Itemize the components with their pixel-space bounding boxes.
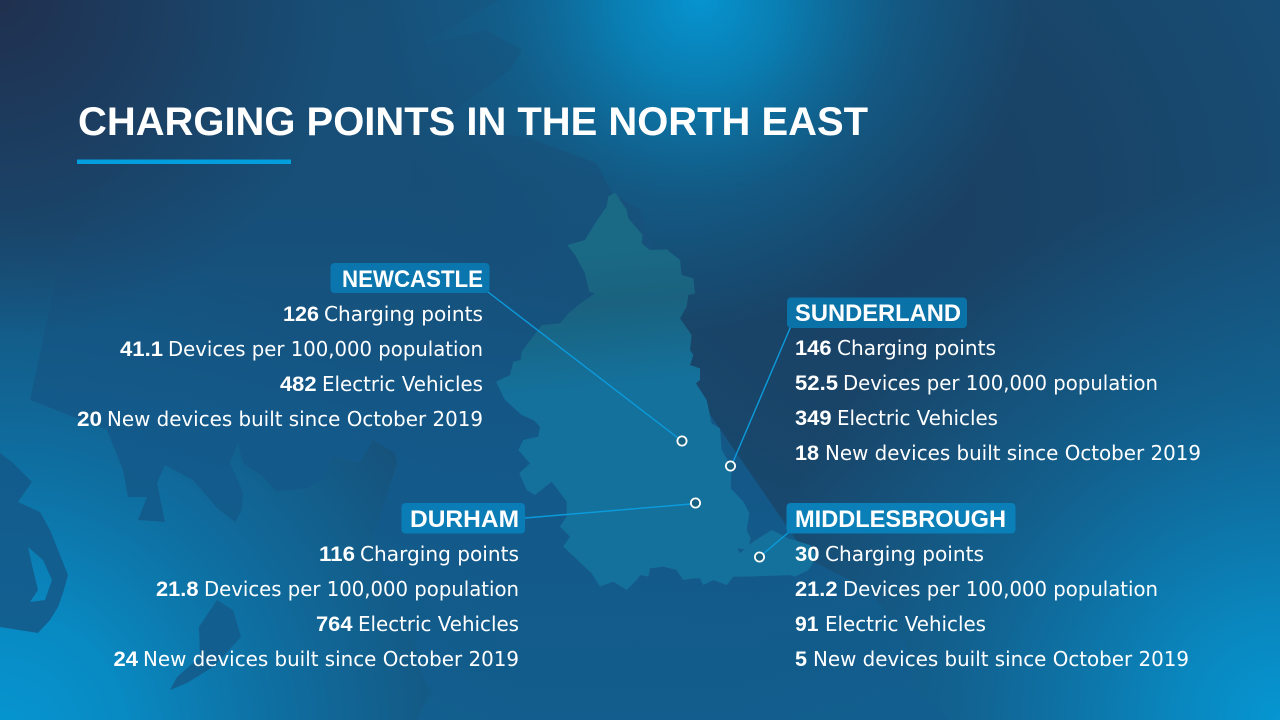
stats: Middlesbrough: Devices per 100,000 population: [843, 577, 1158, 601]
stats: Newcastle: Devices per 100,000 population: [168, 337, 483, 361]
stats: Newcastle: New devices built since October 2019: [107, 407, 483, 431]
stats: Newcastle: 126: [283, 302, 319, 326]
panel: Newcastle: [77, 263, 490, 431]
stats: Durham: 24: [114, 647, 138, 671]
stats: Durham: [114, 542, 519, 671]
connector: Sunderland: [726, 326, 791, 471]
stats: Newcastle: Electric Vehicles: [322, 372, 483, 396]
stats: Sunderland: [795, 336, 1201, 465]
stats: Middlesbrough: New devices built since October 2019: [813, 647, 1189, 671]
connector: Durham: [525, 498, 700, 518]
stats: Newcastle: 482: [280, 372, 317, 396]
title underline: [77, 160, 291, 164]
map: surrounding land masses: [0, 0, 950, 720]
stats: Middlesbrough: Charging points: [825, 542, 984, 566]
stats: Sunderland: Devices per 100,000 population: [843, 371, 1158, 395]
stats: Durham: New devices built since October 2019: [143, 647, 519, 671]
stats: Sunderland: New devices built since October 2019: [825, 441, 1201, 465]
map: North East region: [496, 193, 817, 590]
heading: Durham: DURHAM: [410, 506, 519, 533]
stats: Middlesbrough: 91: [795, 612, 819, 636]
panel: Sunderland: [787, 298, 1201, 465]
stats: Newcastle: [77, 302, 483, 431]
stats: Durham: Electric Vehicles: [358, 612, 519, 636]
stats: Sunderland: 349: [795, 406, 832, 430]
stats: Durham: Devices per 100,000 population: [204, 577, 519, 601]
stats: Sunderland: 52.5: [795, 371, 838, 395]
stats: Middlesbrough: 5: [795, 647, 807, 671]
stats: Durham: 116: [319, 542, 355, 566]
heading: Sunderland: SUNDERLAND: [795, 300, 961, 327]
stats: Middlesbrough: Electric Vehicles: [825, 612, 986, 636]
panel: Durham: [114, 503, 525, 671]
panel: Middlesbrough: [786, 503, 1189, 671]
stats: Newcastle: Charging points: [324, 302, 483, 326]
stats: Sunderland: 18: [795, 441, 819, 465]
stats: Middlesbrough: [795, 542, 1189, 671]
stats: Sunderland: Charging points: [837, 336, 996, 360]
stats: Newcastle: 20: [77, 407, 102, 431]
stats: Middlesbrough: 21.2: [795, 577, 838, 601]
stats: Newcastle: 41.1: [120, 337, 163, 361]
stats: Durham: 21.8: [156, 577, 199, 601]
title: CHARGING POINTS IN THE NORTH EAST: [78, 100, 868, 144]
stats: Durham: 764: [316, 612, 353, 636]
stats: Middlesbrough: 30: [795, 542, 820, 566]
heading: Newcastle: NEWCASTLE: [342, 266, 483, 293]
heading: Middlesbrough: MIDDLESBROUGH: [795, 506, 1006, 533]
connector: Newcastle: [488, 292, 687, 446]
stats: Durham: Charging points: [360, 542, 519, 566]
stats: Sunderland: Electric Vehicles: [837, 406, 998, 430]
stats: Sunderland: 146: [795, 336, 832, 360]
connector: Middlesbrough: [755, 532, 789, 562]
